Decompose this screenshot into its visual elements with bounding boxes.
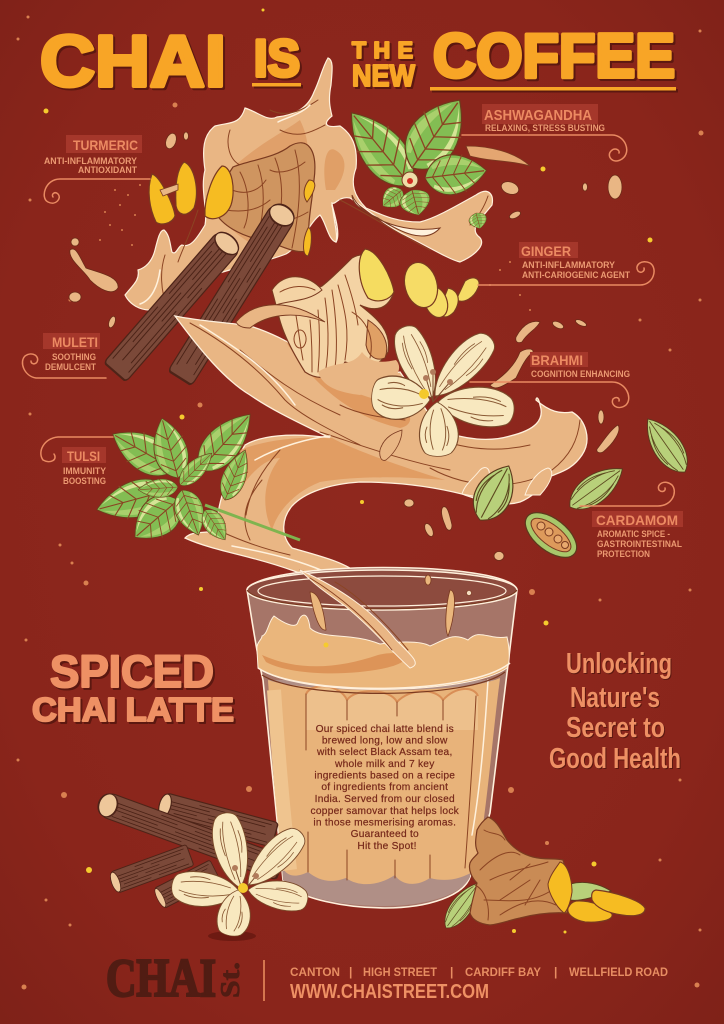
footer locations: WELLFIELD ROAD: [569, 965, 668, 979]
turmeric slice: [205, 166, 233, 219]
callout: muleti: DEMULCENT: [45, 362, 96, 372]
description text: Guaranteed to: [351, 829, 419, 840]
callout: turmeric: [44, 135, 150, 203]
small flower: [402, 172, 418, 188]
speckles and spice dots: [44, 8, 652, 934]
tagline: unlocking nature's secret: Unlocking: [566, 648, 672, 680]
main milk swirl: [175, 316, 587, 650]
milk drips: [462, 468, 552, 500]
callout: muleti: MULETI: [52, 334, 98, 350]
description text: Our spiced chai latte blend is: [316, 724, 454, 735]
title word: coffee: COFFEE: [433, 22, 675, 91]
cardamom pods: [464, 411, 697, 566]
cardamom open: [518, 504, 584, 566]
turmeric slice: [176, 162, 196, 214]
callout: tulsi: BOOSTING: [63, 476, 106, 486]
callout: turmeric: TURMERIC: [73, 137, 138, 153]
glass rim: [247, 570, 517, 610]
callout: ginger: ANTI-CARIOGENIC AGENT: [522, 270, 630, 280]
small stem between slices: [160, 184, 178, 196]
description text: brewed long, low and slow: [322, 736, 448, 746]
callout: brahmi: COGNITION ENHANCING: [531, 369, 630, 379]
tagline: unlocking nature's secret: Nature's: [570, 682, 660, 714]
callout: brahmi: [470, 352, 630, 407]
description text: copper samovar that helps lock: [311, 806, 460, 817]
callout: ashwagandha: ASHWAGANDHA: [484, 107, 592, 124]
tagline: unlocking nature's secret: [549, 648, 681, 775]
footer locations: |: [554, 965, 557, 979]
footer website: WWW.CHAISTREET.COM: [290, 981, 489, 1003]
footer logo: CHAI: [106, 948, 216, 1008]
bottom muleti sticks: [95, 790, 284, 909]
liquid lower: [268, 678, 500, 884]
cardamom 1: [464, 458, 524, 528]
bottom turmeric cut face: [548, 862, 572, 913]
callout: tulsi: [41, 437, 113, 486]
callout: cardamom: PROTECTION: [597, 549, 650, 559]
ginger root: [236, 249, 399, 395]
bottom flower: [170, 810, 311, 941]
description text: Hit the Spot!: [357, 841, 417, 852]
bottom turmeric slices: [568, 901, 612, 922]
footer locations: HIGH STREET: [363, 965, 438, 979]
description text: of ingredients from ancient: [321, 782, 448, 793]
liquid upper band: [257, 615, 509, 689]
ginger cut face: [359, 249, 394, 301]
callout: cardamom: [580, 482, 683, 559]
footer locations: [290, 965, 668, 979]
wisp behind ashwagandha: [466, 146, 530, 166]
cardamom 2: [562, 458, 631, 518]
footer locations: CANTON: [290, 965, 340, 979]
description text: whole milk and 7 key: [334, 759, 435, 770]
turmeric slice: [149, 174, 175, 224]
brahmi flower: [370, 321, 516, 457]
title word: chai: CHAI: [40, 22, 226, 102]
callout: brahmi: BRAHMI: [531, 352, 583, 368]
title: [40, 22, 676, 102]
footer locations: CARDIFF BAY: [465, 965, 541, 979]
ginger slices: [400, 259, 479, 321]
tagline: unlocking nature's secret: Good Health: [549, 743, 681, 775]
title word: new: NEW: [352, 58, 416, 93]
tagline: unlocking nature's secret: Secret to: [566, 712, 665, 744]
footer logo: St.: [215, 962, 245, 998]
description text: India. Served from our closed: [315, 794, 455, 805]
heading: spiced chai latte: SPICED: [50, 646, 214, 697]
turmeric slice right: [304, 180, 315, 256]
title word: the: THE: [352, 37, 413, 63]
muleti stick rear: [168, 199, 299, 385]
bottom cardamom: [438, 877, 487, 934]
description text: with select Black Assam tea,: [316, 747, 453, 758]
ashwagandha small leaf: [467, 211, 489, 231]
heading: spiced chai latte: [32, 646, 234, 728]
muleti stick front: [104, 227, 243, 382]
bottom turmeric root: [469, 817, 572, 925]
turmeric root with slices: [149, 143, 315, 256]
title word: is: IS: [254, 30, 300, 88]
glass of chai: [247, 568, 517, 908]
callout: ginger: GINGER: [521, 243, 571, 259]
cardamom behind slices: [570, 882, 611, 900]
droplets: [69, 132, 622, 561]
callout: ginger: ANTI-INFLAMMATORY: [522, 260, 615, 270]
milk strand over ginger: [236, 305, 325, 328]
callout: ashwagandha: [462, 104, 627, 161]
callout: tulsi: IMMUNITY: [63, 466, 106, 476]
turmeric root: [215, 143, 315, 252]
description text: in those mesmerising aromas.: [313, 818, 456, 828]
callout: ashwagandha: RELAXING, STRESS BUSTING: [485, 123, 605, 133]
callout: cardamom: GASTROINTESTINAL: [597, 539, 682, 549]
callout: muleti: [22, 333, 106, 378]
footer locations: |: [349, 965, 352, 979]
glass splash drops: [310, 590, 454, 636]
stream into glass: [300, 570, 415, 668]
bottom turmeric and cardamom: [438, 817, 645, 934]
ashwagandha leaves: [335, 86, 489, 231]
callout: turmeric: ANTIOXIDANT: [78, 165, 137, 175]
callout: turmeric: ANTI-INFLAMMATORY: [44, 156, 137, 166]
callout: muleti: SOOTHING: [52, 352, 96, 362]
upper milk splash: [125, 58, 530, 311]
callout: tulsi: TULSI: [67, 448, 100, 464]
callout: cardamom: AROMATIC SPICE -: [597, 529, 670, 539]
cardamom 3: [636, 411, 697, 480]
tulsi leaves: [92, 403, 300, 552]
callout: ginger: [478, 242, 654, 285]
heading: spiced chai latte: CHAI LATTE: [32, 691, 234, 728]
milk wave over ginger base: [318, 352, 399, 395]
callout: cardamom: CARDAMOM: [596, 512, 678, 528]
footer locations: |: [450, 965, 453, 979]
description text: ingredients based on a recipe: [314, 770, 455, 782]
glass body: [247, 568, 517, 908]
